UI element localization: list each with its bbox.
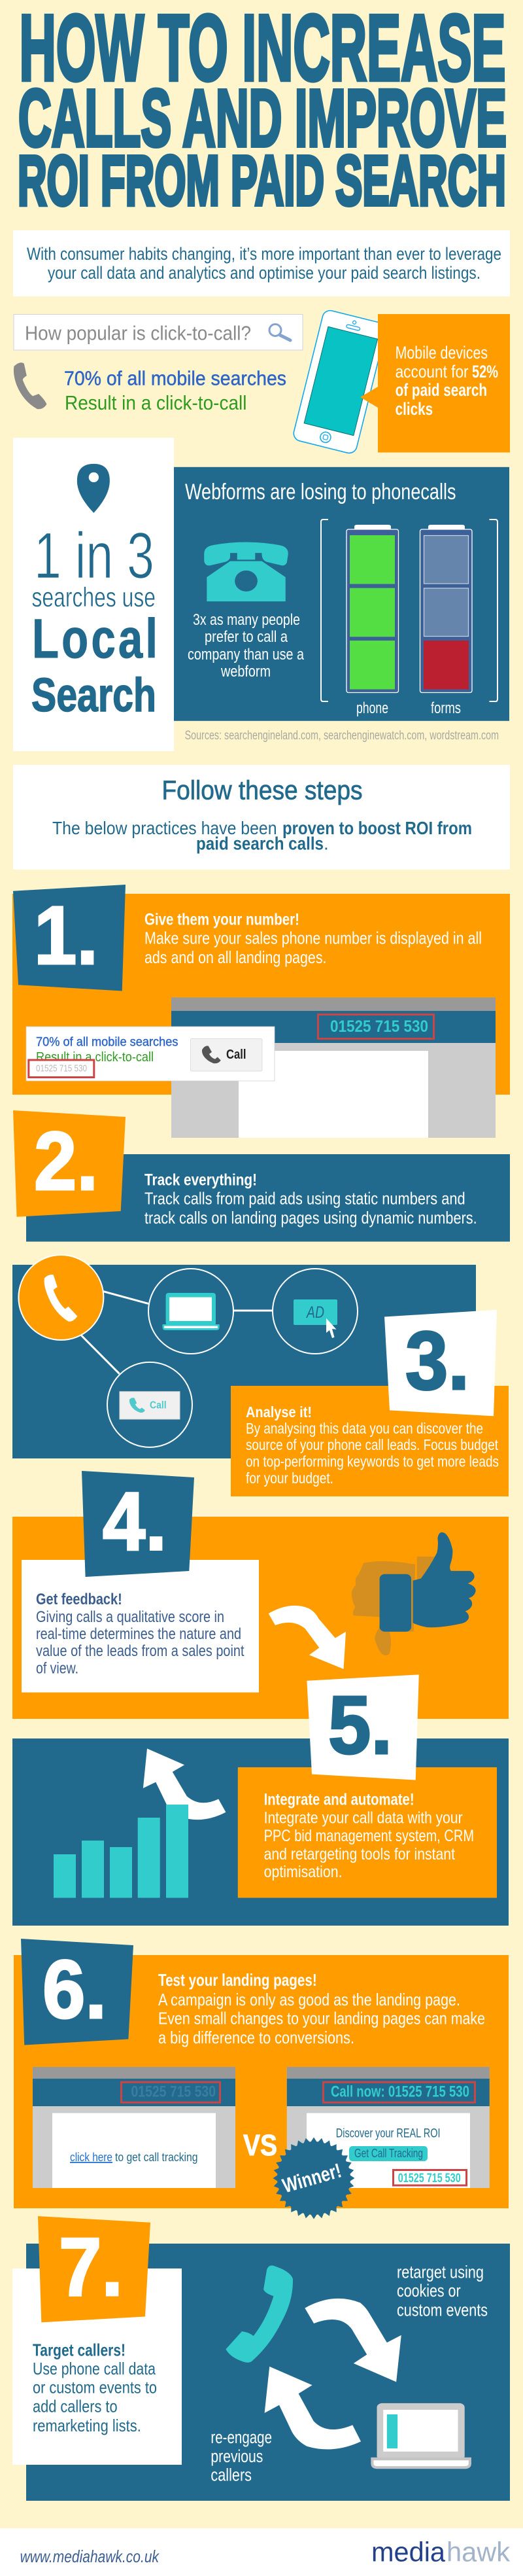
text: give them your number: Give them your number! [144, 911, 299, 929]
text: 3x as many people: company than use a [188, 646, 305, 663]
panel: local search: Search [31, 669, 156, 722]
arrow: to laptop [305, 2299, 401, 2382]
logo: mediahawk: media [371, 2537, 446, 2567]
label: re-engage: callers [211, 2465, 252, 2485]
callout: mobile devices: of paid search [396, 380, 487, 400]
panel: step 7 [12, 2216, 510, 2501]
text: test your landing pages: a big difference to conversions. [158, 2028, 354, 2047]
panel: webforms vs phonecalls: Webforms are losing to phonecalls [185, 480, 456, 504]
icon: call handset [202, 1046, 221, 1063]
text box: get feedback [22, 1560, 259, 1693]
panel: step 5 [12, 1674, 509, 1926]
icon: AD circle: AD [305, 1303, 324, 1322]
callout: mobile devices: 52% [472, 362, 498, 381]
click-to-call stat: Result in a click-to-call [65, 391, 247, 414]
text box: target callers [12, 2268, 182, 2465]
ad card [26, 1027, 275, 1081]
badge: number 6: 6. [42, 1943, 107, 2036]
panel: follow these steps: The below practices have been [52, 818, 277, 838]
icon: thumbs [352, 1532, 476, 1655]
badge: number 2 [13, 1110, 126, 1217]
icon: AD circle [273, 1269, 358, 1354]
callout: mobile devices [360, 314, 510, 453]
badge: number 6 [21, 1939, 133, 2045]
browser mockup B: Get Call Tracking [354, 2147, 423, 2160]
browser mockup B [287, 2067, 490, 2188]
panel: step 2 [13, 1110, 510, 1242]
text box: integrate and automate: Integrate your call data with your [264, 1809, 463, 1827]
text: test your landing pages: Test your landing pages! [158, 1970, 317, 1990]
ad card: 70% of all mobile searches [36, 1036, 178, 1050]
text: track everything: Track calls from paid ads using static numbers and [144, 1189, 465, 1209]
label: re-engage: re-engage [211, 2427, 272, 2447]
badge: number 7: 7. [59, 2221, 123, 2313]
browser mockup: 01525 715 530 [330, 1017, 428, 1036]
badge: number 3: 3. [405, 1314, 469, 1407]
panel: follow these steps: Follow these steps [162, 775, 362, 805]
icon: orange phone circle [18, 1255, 103, 1340]
logo: mediahawk [371, 2537, 511, 2567]
logo: mediahawk: hawk [447, 2537, 511, 2567]
panel: step 3 diagram [12, 1255, 476, 1458]
callout: mobile devices: clicks [396, 399, 433, 419]
badge: number 2: 2. [34, 1115, 98, 1207]
label: re-engage [211, 2427, 272, 2485]
browser mockup [171, 997, 496, 1138]
footer: www.mediahawk.co.uk [20, 2547, 160, 2566]
search box [14, 314, 303, 350]
text: test your landing pages [158, 1970, 485, 2047]
title [18, 0, 507, 220]
search box: How popular is click-to-call? [25, 322, 251, 344]
label: re-engage: previous [211, 2446, 263, 2466]
badge: winner starburst: Winner! [280, 2159, 344, 2197]
text box: integrate and automate: and retargeting tools for instant [264, 1845, 455, 1863]
chart: batteries [321, 520, 498, 717]
panel: follow these steps: . [324, 834, 329, 854]
browser mockup B: 01525 715 530 [398, 2172, 461, 2185]
chart: batteries: phone [356, 699, 388, 717]
ad card: Result in a click-to-call [36, 1050, 154, 1065]
label: retarget: retarget using [397, 2263, 484, 2282]
text: track everything: Track everything! [144, 1171, 257, 1190]
badge: number 4 [82, 1471, 194, 1577]
text box: target callers: remarketing lists. [33, 2416, 141, 2435]
text: analyse it: Analyse it! [246, 1403, 312, 1420]
arrow: growth [143, 1748, 226, 1820]
panel: follow these steps: paid search calls [196, 834, 324, 854]
panel: step 4 [12, 1471, 509, 1719]
text box: integrate and automate [238, 1767, 497, 1897]
icon: grey handset [14, 362, 46, 409]
browser mockup A: to get call tracking [115, 2151, 197, 2164]
icon: telephone [204, 542, 288, 601]
browser mockup B: Discover your REAL ROI [336, 2126, 441, 2141]
label: retarget: cookies or [397, 2281, 461, 2301]
icon: laptop [371, 2403, 471, 2469]
panel: step 6 [14, 1939, 509, 2225]
text box: target callers: add callers to [33, 2397, 118, 2416]
text: 3x as many people [188, 611, 305, 680]
footer [0, 2528, 523, 2576]
icon: smartphone [292, 309, 387, 455]
text: give them your number [144, 911, 482, 967]
text box: target callers: or custom events to [33, 2378, 157, 2397]
panel: local search: 1 in 3 [34, 520, 154, 593]
text box: get feedback: Get feedback! [36, 1591, 122, 1608]
label: retarget: custom events [397, 2301, 488, 2320]
ad card: 01525 715 530 [36, 1063, 87, 1074]
badge: number 4: 4. [103, 1475, 167, 1568]
icon: call button circle: Call [150, 1400, 167, 1411]
panel: local search: searches use [31, 582, 156, 612]
text box: get feedback: Giving calls a qualitative score in [36, 1608, 224, 1626]
badge: number 7 [38, 2216, 150, 2322]
text: track everything [144, 1171, 477, 1227]
badge: number 1: 1. [34, 889, 98, 981]
panel: step 3 text [231, 1310, 509, 1496]
text: test your landing pages: A campaign is only as good as the landing page. [158, 1990, 460, 2009]
text box: integrate and automate: Integrate and automate! [264, 1790, 414, 1808]
text box: get feedback: value of the leads from a sales point [36, 1642, 245, 1660]
badge: number 5: 5. [328, 1679, 392, 1771]
panel: step 1 [12, 885, 510, 1138]
browser mockup B: Call now: 01525 715 530 [331, 2083, 469, 2100]
text box: target callers: Target callers! [33, 2340, 126, 2360]
text: analyse it: for your budget. [246, 1470, 333, 1487]
icon: laptop circle [148, 1269, 233, 1354]
panel: follow these steps [13, 765, 510, 870]
text: give them your number: ads and on all landing pages. [144, 947, 327, 967]
callout: mobile devices: account for [396, 362, 469, 381]
icon: magnifier [269, 325, 290, 340]
icon: teal handset [226, 2265, 293, 2363]
badge: winner starburst [267, 2131, 361, 2225]
browser mockup A [33, 2067, 235, 2188]
click-to-call stat: 70% of all mobile searches [64, 367, 286, 390]
ad card: Call [226, 1048, 246, 1062]
text: 3x as many people: webform [220, 663, 271, 680]
text box: get feedback: of view. [36, 1660, 78, 1678]
badge: number 3 [384, 1310, 497, 1416]
chart: bars [54, 1805, 188, 1897]
badge: number 5 [307, 1674, 419, 1780]
text: 3x as many people: prefer to call a [205, 628, 288, 646]
chart: batteries: forms [431, 699, 461, 717]
panel: follow these steps: proven to boost ROI from [282, 818, 472, 838]
browser mockup A: click here [70, 2151, 112, 2164]
text box: integrate and automate: optimisation. [264, 1863, 343, 1881]
VS label: VS [243, 2128, 277, 2162]
panel: local search [13, 438, 174, 751]
icon: call button circle [107, 1362, 192, 1447]
text box: get feedback: real-time determines the nature and [36, 1625, 241, 1643]
badge: number 1 [13, 885, 126, 991]
text: analyse it [246, 1403, 499, 1487]
arrow: thumbs to step 5 [269, 1606, 346, 1669]
callout: mobile devices: Mobile devices [396, 343, 488, 362]
panel: intro [13, 230, 510, 296]
text box: integrate and automate: PPC bid management system, CRM [264, 1827, 474, 1845]
text box: target callers: Use phone call data [33, 2359, 156, 2378]
label: retarget [397, 2263, 488, 2320]
icon: map pin [77, 464, 110, 513]
panel: local search: Local [32, 609, 158, 670]
browser mockup A: 01525 715 530 [131, 2083, 216, 2100]
arrow: to phone [265, 2367, 361, 2449]
panel: webforms vs phonecalls [174, 467, 509, 721]
text: 3x as many people: 3x as many people [193, 611, 300, 629]
click-to-call stat [64, 367, 286, 414]
